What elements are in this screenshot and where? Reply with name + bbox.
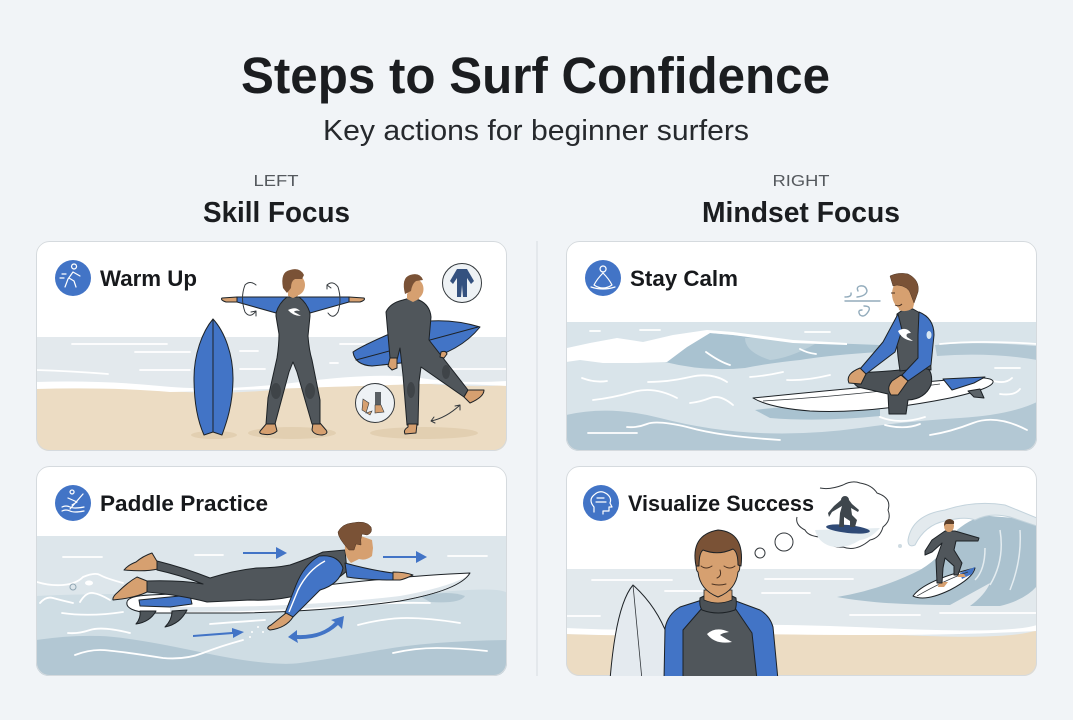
- panel: visualize success: [566, 466, 1037, 680]
- heading: warm up: Warm Up: [100, 266, 197, 291]
- icon: wetsuit badge: [442, 264, 482, 302]
- figure: seated surfer: [848, 273, 934, 414]
- right column heading: RIGHT: [772, 173, 830, 190]
- figure: surfer eyes closed: [664, 530, 778, 680]
- right column heading: [702, 173, 900, 229]
- big wave: [837, 516, 1037, 606]
- surfboard foreground: [610, 584, 664, 676]
- thought bubbles: [755, 482, 889, 558]
- panel: warm up: [36, 241, 507, 451]
- left column heading: [203, 173, 350, 229]
- figure: imagined surfer: [826, 496, 870, 535]
- icon: brain badge: [583, 485, 619, 521]
- heading: visualize success: Visualize Success: [628, 491, 814, 516]
- surfboard: [127, 573, 470, 627]
- icon: breath: [845, 286, 880, 316]
- right column heading: Mindset Focus: [702, 197, 900, 229]
- left column heading: LEFT: [254, 173, 299, 190]
- title: Steps to Surf Confidence: [241, 47, 830, 104]
- icon: surfboard: [194, 319, 233, 435]
- heading: stay calm: Stay Calm: [630, 266, 738, 291]
- subtitle: Key actions for beginner surfers: [323, 115, 749, 147]
- panel: paddle practice: [36, 466, 507, 676]
- panel: stay calm: [566, 241, 1037, 451]
- icon: warm up badge: [55, 260, 91, 296]
- surfboard: [753, 377, 993, 411]
- icon: paddle badge: [55, 485, 91, 521]
- heading: paddle practice: Paddle Practice: [100, 491, 268, 516]
- left column heading: Skill Focus: [203, 197, 350, 229]
- figure: arm circles: [222, 269, 364, 435]
- figure: surfer on wave: [913, 519, 979, 598]
- figure: swimmer paddling: [113, 522, 413, 630]
- icon: ankle badge: [356, 384, 394, 422]
- splash dots: [249, 626, 264, 638]
- arrows: motion: [193, 547, 427, 643]
- icon: meditation badge: [585, 260, 621, 296]
- figure: leg swings with board: [353, 274, 484, 434]
